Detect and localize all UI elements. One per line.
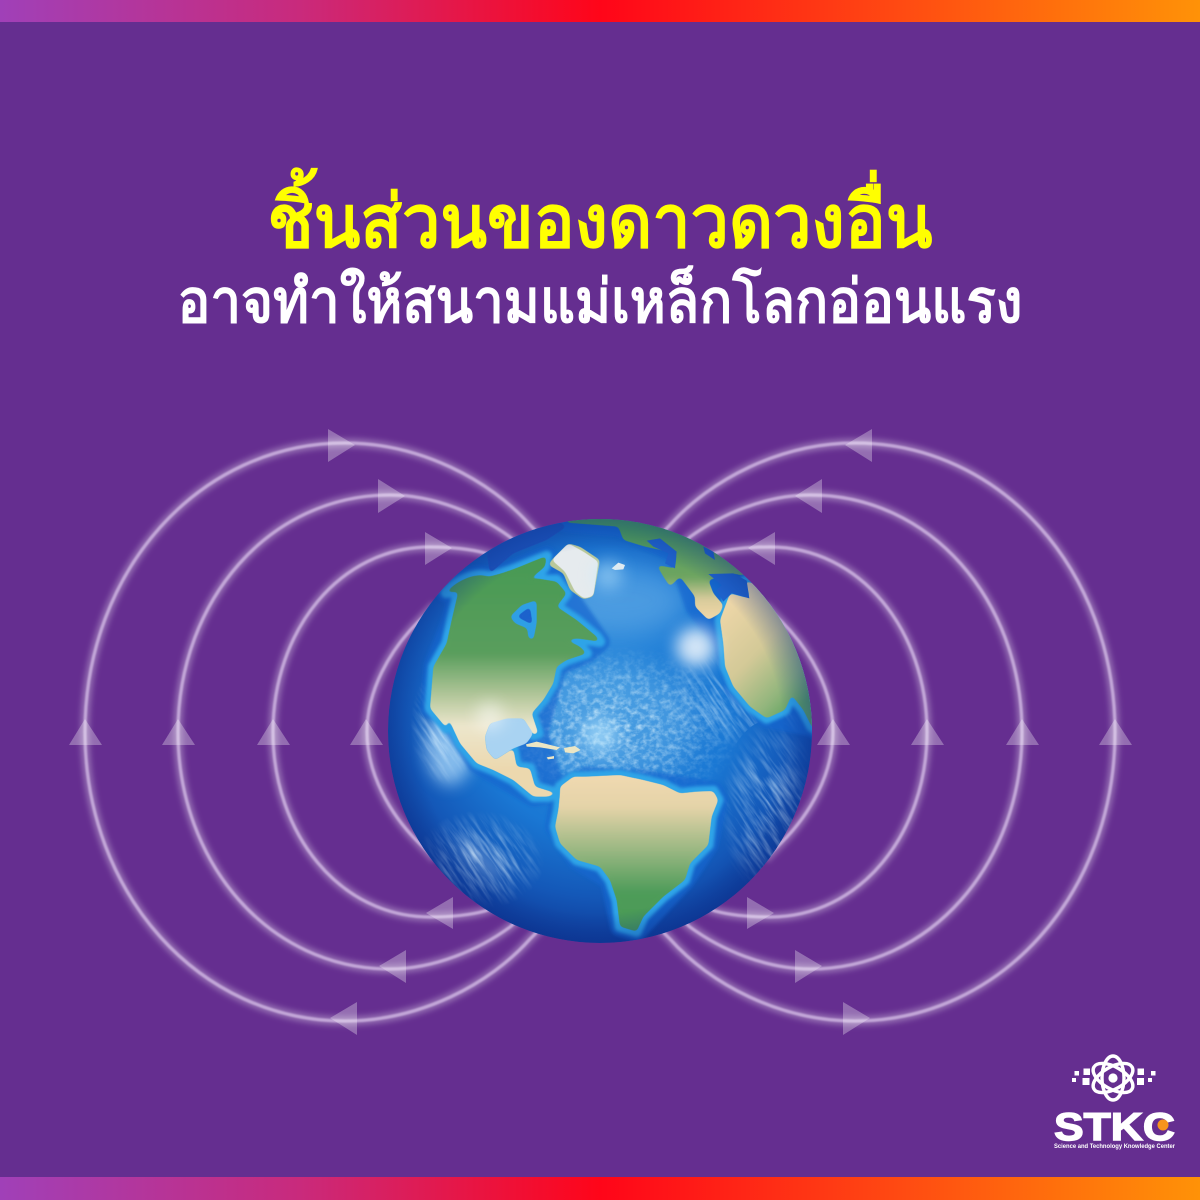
ocean speckle texture <box>521 651 734 780</box>
globe highlights <box>451 561 716 887</box>
logo wordmark: STKC <box>1054 1106 1175 1149</box>
STKC logo <box>1054 1056 1176 1150</box>
ocean brush streak texture <box>412 662 806 902</box>
continents <box>430 510 827 932</box>
field lines: left <box>85 443 550 1021</box>
logo tagline: Science and Technology Knowledge Center <box>1054 1144 1176 1150</box>
magnetic field lines <box>85 443 1115 1021</box>
north america <box>430 556 600 797</box>
top gradient bar <box>0 0 1200 22</box>
outer dark shelf <box>430 510 827 932</box>
south america <box>555 775 718 932</box>
hudson bay <box>510 600 537 640</box>
arrows: bottom right pointing right <box>747 897 870 1035</box>
gulf of mexico <box>485 718 533 760</box>
bottom gradient bar <box>0 1177 1200 1200</box>
ocean soft glow <box>426 565 695 785</box>
logo pixel squares <box>1072 1068 1156 1085</box>
arrows: bottom left pointing left <box>330 897 453 1035</box>
africa <box>720 582 812 726</box>
greenland <box>548 543 600 599</box>
iceland <box>612 563 625 570</box>
field direction arrows <box>69 429 1132 1035</box>
title line 1: ชิ้นส่วนของดาวดวงอื่น <box>268 167 932 263</box>
field lines: right <box>650 443 1115 1021</box>
ocean <box>388 519 812 943</box>
globe rim shading <box>388 519 812 943</box>
title line 2: อาจทำให้สนามแม่เหล็กโลกอ่อนแรง <box>178 265 1022 335</box>
coastal shelf <box>430 556 827 932</box>
europe <box>568 519 744 619</box>
dark blue shelf patch at top left <box>488 522 564 571</box>
arrows: top right pointing left <box>748 429 872 565</box>
earth globe <box>388 519 812 943</box>
arrows: pointing up right side <box>817 719 1132 745</box>
arrows: top left pointing right <box>328 429 452 565</box>
logo atom icon <box>1088 1056 1138 1100</box>
title <box>178 167 1022 335</box>
arrows: pointing up left side <box>69 719 383 745</box>
caribbean islands <box>526 742 581 759</box>
logo orange dot <box>1158 1120 1168 1130</box>
baltic and mediterranean water <box>647 538 749 602</box>
